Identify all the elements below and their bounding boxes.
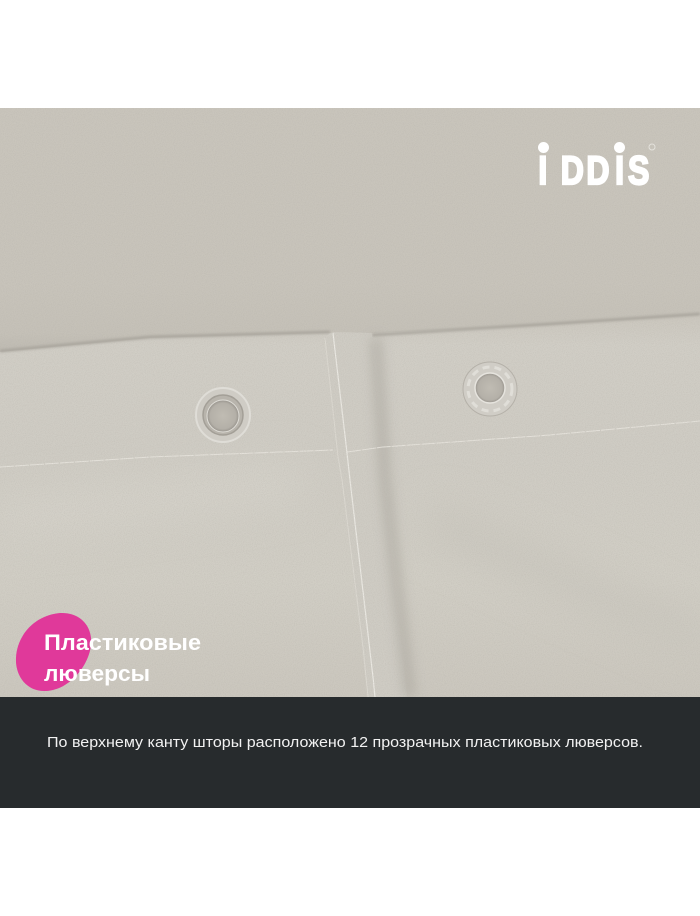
heading: люверсы <box>44 661 150 686</box>
seam: horizontal stitching <box>0 421 700 467</box>
hem shadows <box>0 314 700 351</box>
seam: vertical stitching <box>333 333 375 697</box>
accent blob <box>16 613 91 691</box>
icon: right grommet <box>463 362 517 416</box>
fold shadow <box>376 338 410 697</box>
soft fabric shading <box>0 480 700 640</box>
icon: left grommet <box>196 388 250 442</box>
caption band <box>0 697 700 808</box>
heading: Пластиковые <box>44 630 201 655</box>
fabric texture <box>0 327 700 697</box>
lower fabric panels <box>0 315 700 697</box>
caption text: По верхнему канту шторы расположено 12 прозрачных пластиковых люверсов. <box>47 735 643 751</box>
vertical fold <box>332 332 372 336</box>
heading <box>44 630 201 686</box>
photo: curtain fabric <box>0 108 700 697</box>
upper fabric <box>0 108 700 358</box>
logo: IDDIS: IDDIS <box>538 148 649 193</box>
